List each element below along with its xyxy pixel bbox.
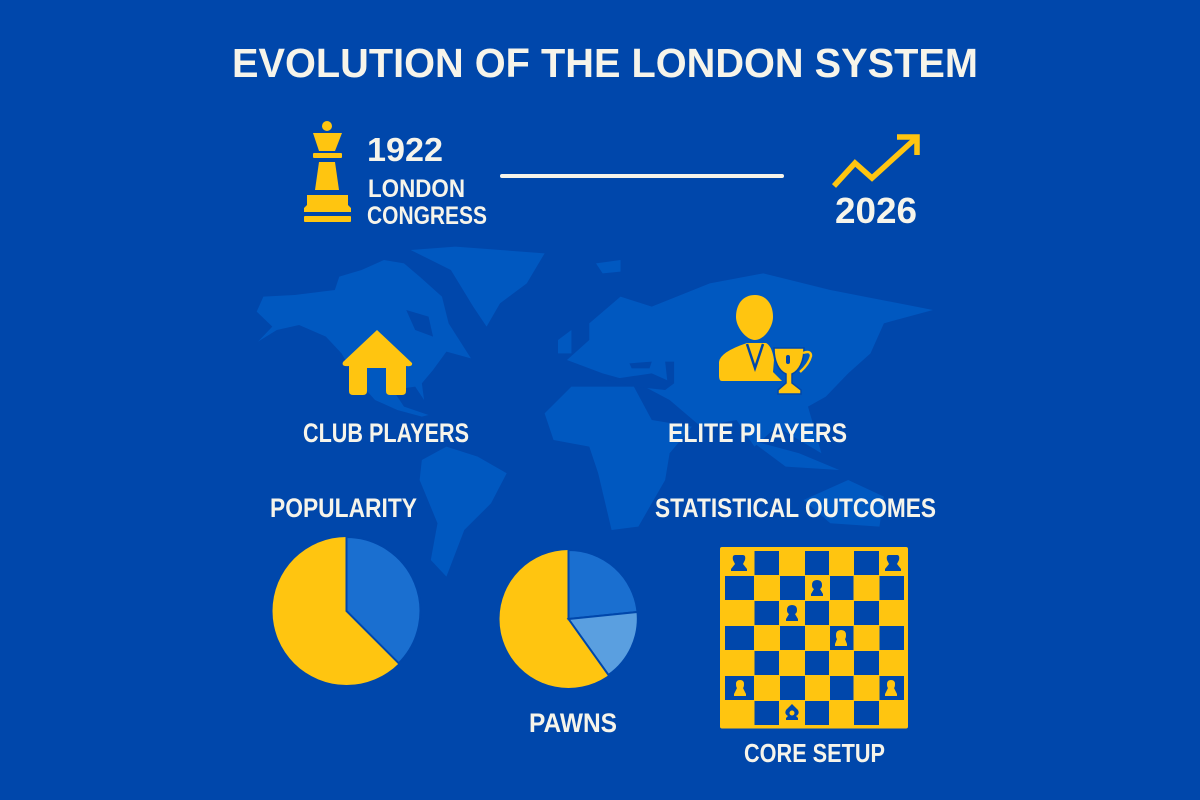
- timeline start: 1922 London Congress: [304, 121, 487, 230]
- popularity: [270, 493, 420, 685]
- world map background: [257, 247, 933, 577]
- icon: rising arrow: [834, 137, 917, 186]
- label London Congress: CONGRESS: [367, 202, 487, 230]
- chess board: [720, 547, 908, 728]
- icon: chess king: [304, 121, 351, 222]
- label: CORE SETUP: [744, 738, 885, 768]
- year 1922: 1922: [367, 131, 443, 168]
- pie chart: [272, 537, 420, 685]
- icon: player with trophy: [719, 295, 811, 394]
- pawns: [500, 550, 638, 738]
- timeline line: [500, 174, 784, 178]
- pawns on the board: [731, 555, 901, 720]
- label London Congress: [367, 175, 487, 230]
- heading: POPULARITY: [270, 493, 417, 523]
- label: PAWNS: [529, 708, 617, 738]
- club players: [303, 330, 469, 448]
- icon: house: [343, 330, 412, 395]
- elite players: [668, 295, 847, 448]
- label London Congress: LONDON: [368, 175, 465, 203]
- label: ELITE PLAYERS: [668, 418, 847, 448]
- timeline end: 2026: [834, 137, 917, 231]
- year 2026: 2026: [835, 190, 917, 231]
- heading: STATISTICAL OUTCOMES: [655, 493, 936, 523]
- pie chart: [500, 550, 638, 688]
- title: EVOLUTION OF THE LONDON SYSTEM: [232, 40, 978, 86]
- label: CLUB PLAYERS: [303, 418, 469, 448]
- statistical outcomes: [655, 493, 936, 768]
